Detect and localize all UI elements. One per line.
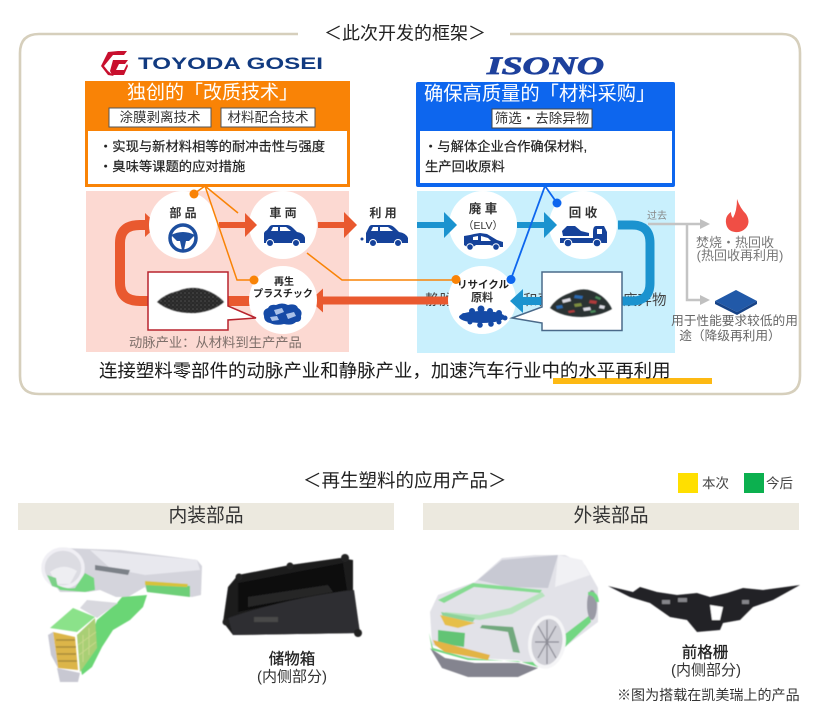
- arrow: past route to incineration and downcycling: 过去: [647, 209, 667, 222]
- text block: technology points: [88, 131, 347, 184]
- image: dashboard and console: [43, 548, 202, 682]
- arrow: use to ELV: [417, 212, 457, 238]
- text: downcycling use: [671, 313, 798, 343]
- label: collection with tow truck icon: 回 收: [569, 205, 598, 220]
- panel: securing quality material procurement: [416, 82, 675, 187]
- header: interior parts: 内装部品: [168, 504, 244, 526]
- underline highlight: [553, 378, 712, 384]
- panel: proprietary modification technology: [85, 81, 350, 187]
- text: incineration and heat recovery: 焚烧・热回收: [696, 235, 774, 250]
- text block: technology points: ・实现与新材料相等的耐冲击性与强度: [99, 138, 325, 154]
- circle: parts: [149, 191, 217, 259]
- text block: procurement points: 生产回收原料: [425, 159, 505, 174]
- label: recycled raw material with flakes icon: [457, 279, 509, 328]
- panel: artery industry background: [86, 191, 349, 352]
- text block: procurement points: ・与解体企业合作确保材料,: [424, 138, 587, 154]
- title: framework: ＜此次开发的框架＞: [324, 24, 486, 44]
- label: ELV with damaged car icon: 廃 車: [469, 201, 497, 216]
- legend: this time and future: 今后: [766, 476, 793, 491]
- arrow: collection to callout: [618, 225, 650, 301]
- arrow: recycled plastic back to parts: [120, 213, 260, 301]
- circle: vehicle: [249, 191, 317, 259]
- label: ELV with damaged car icon: [463, 201, 503, 250]
- image: front grille part: [608, 585, 800, 632]
- label: recycled plastic with pellets icon: [253, 275, 313, 325]
- connector: blue lines from procurement box: [506, 186, 562, 284]
- chip: material blending technology: 材料配合技术: [228, 110, 308, 125]
- caption: front grille: 前格栅: [682, 644, 728, 662]
- callout: mixed plastic waste: [512, 272, 622, 330]
- image: car body: [429, 555, 599, 677]
- panel: vein industry background: [417, 191, 675, 353]
- legend: this time and future: 本次: [702, 476, 729, 491]
- header: exterior parts: [423, 503, 799, 530]
- label: parts with steering wheel icon: [169, 205, 197, 251]
- label: vehicle with car icon: 車 両: [269, 205, 297, 220]
- caption: storage box: (内侧部分): [257, 668, 327, 686]
- icon: flame: [726, 199, 748, 232]
- circle: ELV: [449, 191, 517, 259]
- arrow: vehicle to use: [318, 212, 357, 238]
- arrow: waste to recycled raw material: [510, 289, 545, 313]
- text: connecting artery and vein industries: 连接塑料零部件的动脉产业和静脉产业，加速汽车行业中的水平再利用: [99, 360, 671, 381]
- label: ELV with damaged car icon: （ELV）: [463, 220, 503, 232]
- arrow: past route to incineration and downcycling: [647, 209, 710, 305]
- circle: recycled plastic: [249, 266, 317, 334]
- label: recycled plastic with pellets icon: プラスチック: [253, 288, 313, 300]
- chip: coating peel technology: [109, 108, 211, 127]
- label: recycled raw material with flakes icon: リサイクル: [457, 279, 509, 291]
- caption: front grille: (内侧部分): [671, 662, 741, 679]
- text: partly hidden vein industry label: 和再: [523, 292, 552, 309]
- text block: technology points: ・臭味等课题的应对措施: [99, 158, 245, 174]
- note: product on Camry: ※图为搭载在凯美瑞上的产品: [617, 687, 800, 703]
- chip: material blending technology: [221, 108, 315, 127]
- text: artery industry caption: 动脉产业：从材料到生产产品: [129, 335, 302, 350]
- chip: coating peel technology: 涂膜剥离技术: [120, 109, 200, 125]
- label: collection with tow truck icon: [560, 205, 607, 247]
- heading: proprietary technology: 独创的「改质技术」: [127, 82, 298, 104]
- header: exterior parts: 外装部品: [573, 504, 649, 526]
- label: vehicle with car icon: [264, 205, 305, 246]
- caption: storage box: 储物箱: [269, 650, 315, 668]
- callout: recycled plastic pellets: [148, 272, 256, 330]
- header: interior parts: [18, 503, 394, 530]
- logo: ISONO: ISONO: [485, 53, 604, 80]
- caption: storage box: [257, 650, 327, 686]
- legend: this time and future: [678, 473, 793, 493]
- text: partly hidden vein industry label: 废弃物: [623, 292, 666, 309]
- circle: recycled raw material: [448, 266, 516, 334]
- heading: material procurement: 确保高质量的「材料采购」: [424, 83, 655, 105]
- text: incineration and heat recovery: (热回收再利用): [697, 248, 783, 263]
- text: downcycling use: 途（降级再利用）: [679, 328, 781, 343]
- text: incineration and heat recovery: [696, 235, 783, 263]
- label: use with car icon: 利 用: [369, 205, 397, 220]
- logo: Toyoda Gosei: TOYODA GOSEI: [138, 54, 323, 73]
- label: recycled plastic with pellets icon: 再生: [274, 275, 294, 288]
- title: applications: ＜再生塑料的应用产品＞: [303, 470, 507, 491]
- connector: orange lines from technology box: [190, 186, 460, 284]
- label: parts with steering wheel icon: 部 品: [169, 205, 197, 220]
- frame: development framework: [20, 34, 800, 394]
- arrow: recycled raw material to recycled plastic: [310, 288, 455, 312]
- label: use with car icon: [360, 205, 408, 246]
- image: black glove box: [222, 554, 362, 637]
- arrow: ELV to collection: [517, 212, 557, 238]
- chip: sorting and removing foreign matter: 筛选・去除异物: [495, 111, 589, 126]
- caption: front grille: [671, 644, 741, 679]
- logo: Toyoda Gosei: [101, 51, 323, 76]
- icon: recycled pallet: [715, 290, 757, 315]
- text: partly hidden vein industry label: 静脉: [425, 292, 454, 309]
- text block: procurement points: [420, 131, 672, 183]
- text: partly hidden vein industry label: [425, 292, 666, 309]
- circle: collection: [549, 191, 617, 259]
- label: recycled raw material with flakes icon: 原料: [471, 290, 493, 304]
- arrow: parts to vehicle: [219, 213, 257, 237]
- text: downcycling use: 用于性能要求较低的用: [671, 313, 798, 328]
